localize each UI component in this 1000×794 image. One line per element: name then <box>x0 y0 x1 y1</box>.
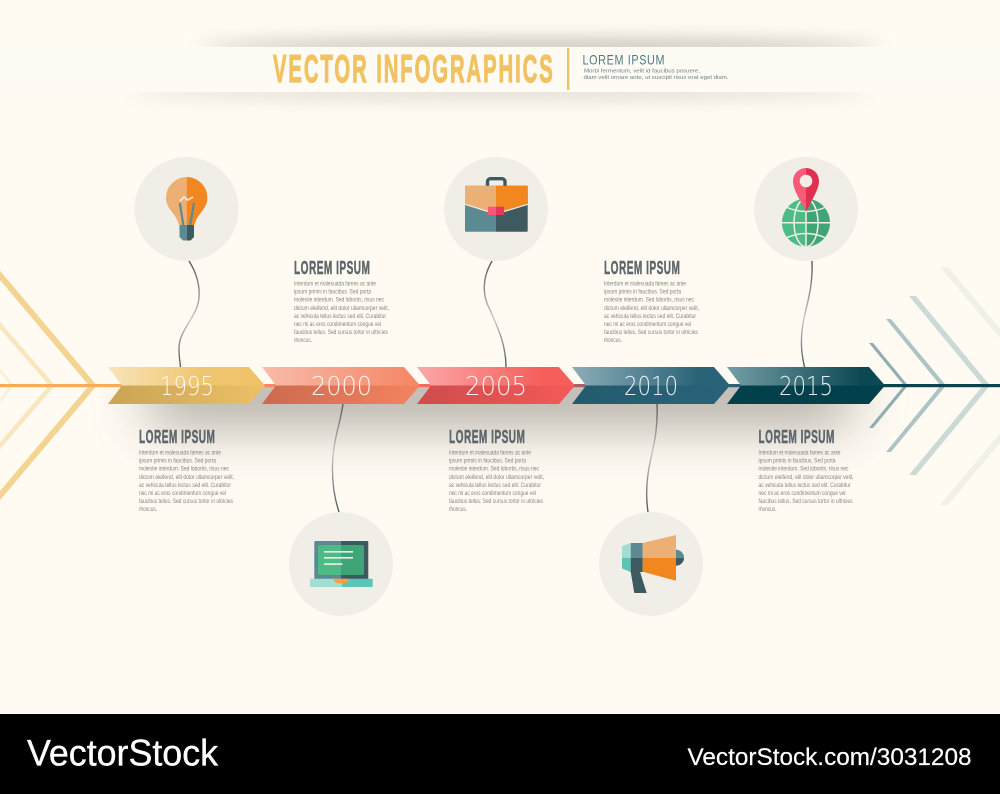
text block: 2015: Interdum et malesuada fames ac ante <box>758 450 841 456</box>
text block: 2000: dictum eleifend, elit dolor ullamcorper velit, <box>294 305 389 312</box>
text block: 2000: molestie interdum. Sed lobortis, risus nec <box>294 297 385 304</box>
chevron 2005 <box>417 367 575 404</box>
text block: 2005: rhoncus. <box>449 506 467 513</box>
icon: laptop <box>289 512 393 616</box>
text block: 2010: molestie interdum. Sed lobortis, risus nec <box>604 297 695 304</box>
text block: 2015: faucibus tellus. Sed cursus tortor in ultricies <box>758 498 853 505</box>
text block: 2010: LOREM IPSUM <box>604 259 680 279</box>
text block: 2015: molestie interdum. Sed lobortis, risus nec <box>758 466 849 473</box>
text block: 1995: dictum eleifend, elit dolor ullamcorper velit, <box>139 474 234 481</box>
chevron 1995 <box>108 367 265 404</box>
text block: 2015: ipsum primis in faucibus. Sed porta <box>758 458 836 465</box>
text block: 2005 <box>449 428 544 513</box>
chevron 2005: 2005 <box>465 372 527 402</box>
footer bar <box>0 714 1000 794</box>
header divider <box>567 48 569 90</box>
text block: 2010: faucibus tellus. Sed cursus tortor in ultricies <box>604 329 699 336</box>
text block: 2000: ipsum primis in faucibus. Sed porta <box>294 289 371 296</box>
text block: 2015: LOREM IPSUM <box>758 428 834 448</box>
text block: 2010 <box>604 259 699 344</box>
text block: 2000: rhoncus. <box>294 337 312 344</box>
header subtitle: diam velit ornare ante, ut suscipit risus erat eget diam. <box>584 75 729 81</box>
text block: 2000 <box>294 259 389 344</box>
text block: 2005: molestie interdum. Sed lobortis, risus nec <box>449 466 540 473</box>
text block: 1995: Interdum et malesuada fames ac ante <box>139 450 221 456</box>
text block: 1995: faucibus tellus. Sed cursus tortor in ultricies <box>139 498 234 505</box>
chevron 2015 <box>727 367 885 404</box>
text block: 2005: ipsum primis in faucibus. Sed porta <box>449 458 526 465</box>
text block: 1995: nec mi ac eros condimentum congue vel <box>139 490 226 497</box>
text block: 2000: faucibus tellus. Sed cursus tortor in ultricies <box>294 329 389 336</box>
header band <box>0 40 1000 98</box>
text block: 2005: nec mi ac eros condimentum congue vel <box>449 490 536 497</box>
timeline axis <box>0 384 1000 387</box>
text block: 2005: dictum eleifend, elit dolor ullamcorper velit, <box>449 474 544 481</box>
chevron 2015: 2015 <box>779 372 833 402</box>
connector strings <box>179 261 812 512</box>
icon: briefcase <box>444 157 548 261</box>
text block: 2005: LOREM IPSUM <box>449 428 525 448</box>
chevron 2010: 2010 <box>624 372 678 402</box>
text block: 1995: rhoncus. <box>139 506 157 513</box>
text block: 2005: ac vehicula tellus lectus sed elit. Curabitur <box>449 482 542 489</box>
header subtitle: LOREM IPSUM <box>582 52 665 68</box>
chevron 2000: 2000 <box>311 372 372 402</box>
icon: megaphone <box>599 512 703 616</box>
text block: 2005: Interdum et malesuada fames ac ante <box>449 450 531 456</box>
text block: 2010: ac vehicula tellus lectus sed elit. Curabitur <box>604 313 697 320</box>
text block: 2000: LOREM IPSUM <box>294 259 370 279</box>
text block: 2015 <box>758 428 854 513</box>
text block: 2010: dictum eleifend, elit dolor ullamcorper velit, <box>604 305 699 312</box>
icon: light bulb <box>134 157 238 261</box>
chevron 2010 <box>572 367 730 404</box>
text block: 2015: rhoncus. <box>758 506 777 513</box>
header subtitle <box>582 52 729 81</box>
header subtitle: Morbi fermentum, velit id faucibus posuere, <box>584 68 700 74</box>
text block: 2005: faucibus tellus. Sed cursus tortor in ultricies <box>449 498 544 505</box>
text block: 1995: molestie interdum. Sed lobortis, risus nec <box>139 466 230 473</box>
text block: 2015: dictum eleifend, elit dolor ullamcorper velit, <box>758 474 854 481</box>
footer bar: VectorStock <box>27 732 218 774</box>
icon: globe with map pin <box>754 157 858 261</box>
text block: 1995 <box>139 428 234 513</box>
title: VECTOR INFOGRAPHICS <box>273 47 553 91</box>
left fishbone arrows <box>0 273 93 498</box>
chevron 2000 <box>262 367 420 404</box>
text block: 1995: ipsum primis in faucibus. Sed porta <box>139 458 216 465</box>
text block: 2000: ac vehicula tellus lectus sed elit. Curabitur <box>294 313 387 320</box>
chevron 1995: 1995 <box>160 372 214 402</box>
text block: 1995: LOREM IPSUM <box>139 428 215 448</box>
text block: 2010: rhoncus. <box>604 337 622 344</box>
text block: 2000: nec mi ac eros condimentum congue vel <box>294 321 381 328</box>
footer bar: VectorStock.com/3031208 <box>688 744 972 771</box>
text block: 2010: Interdum et malesuada fames ac ante <box>604 280 686 288</box>
text block: 2015: nec mi ac eros condimentum congue vel <box>758 490 846 497</box>
text block: 1995: ac vehicula tellus lectus sed elit. Curabitur <box>139 482 232 489</box>
text block: 2015: ac vehicula tellus lectus sed elit. Curabitur <box>758 482 851 489</box>
text block: 2010: nec mi ac eros condimentum congue vel <box>604 321 691 328</box>
timeline shadow <box>150 370 850 422</box>
text block: 2000: Interdum et malesuada fames ac ante <box>294 280 376 288</box>
right fishbone arrows <box>869 267 1000 505</box>
text block: 2010: ipsum primis in faucibus. Sed porta <box>604 289 681 296</box>
